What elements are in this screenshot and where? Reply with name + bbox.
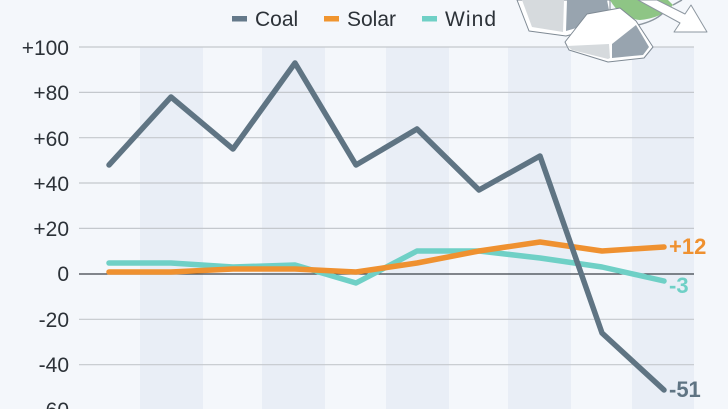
- line: wind: [109, 251, 664, 283]
- legend: Coal: [255, 8, 298, 31]
- y axis labels: -40: [39, 354, 69, 377]
- end labels: -51: [669, 377, 701, 402]
- line: coal: [109, 63, 664, 390]
- y axis labels: +100: [22, 37, 69, 60]
- end labels: [669, 234, 706, 402]
- y axis labels: [22, 37, 69, 409]
- end labels: +12: [669, 234, 706, 259]
- y axis labels: +60: [33, 128, 69, 151]
- icon: coal and green arrow: [517, 0, 707, 62]
- legend: Wind: [445, 8, 496, 31]
- alternating column bands: [140, 47, 694, 409]
- y axis labels: +40: [33, 173, 69, 196]
- legend: [232, 8, 496, 31]
- y axis labels: +20: [33, 218, 69, 241]
- legend: Solar: [347, 8, 396, 31]
- line: solar: [109, 242, 664, 272]
- end labels: -3: [669, 273, 689, 298]
- y axis labels: 0: [57, 263, 69, 286]
- y axis labels: -20: [39, 309, 69, 332]
- y axis labels: +80: [33, 82, 69, 105]
